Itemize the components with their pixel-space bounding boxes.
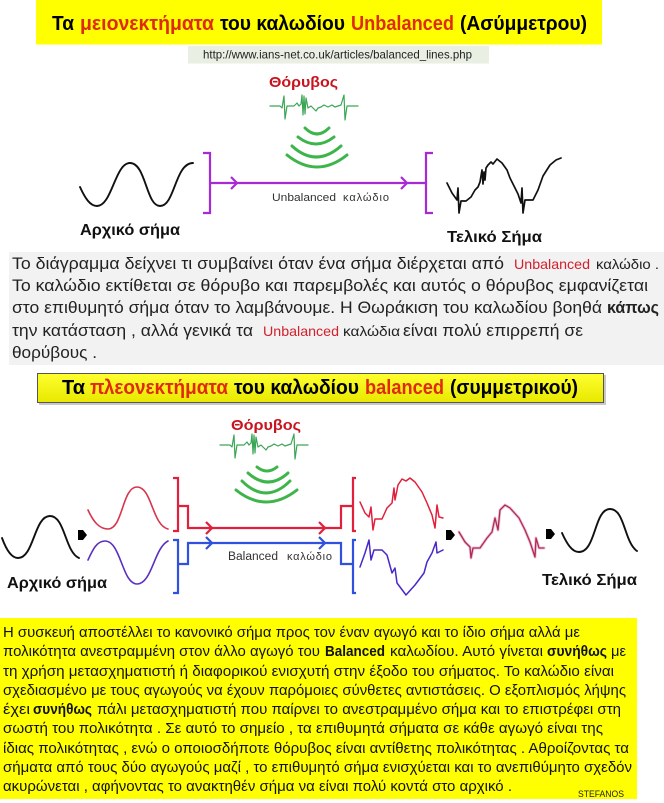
icon: arrow to split <box>78 530 87 540</box>
text panel: unbalanced explanation: Unbalanced <box>263 323 339 339</box>
text panel: unbalanced explanation <box>9 252 664 365</box>
chart: noisy blue signal <box>360 540 443 595</box>
text panel: balanced explanation: σήματα από τους δύο αγωγούς μαζί , το επιθυμητό σήμα ενισχύεται και το ανεπιθύμητο σχεδόν <box>3 759 632 776</box>
text panel: balanced explanation: σχεδιασμένο με τους αγωγούς να έχουν παρόμοιες σύνθετες αντιστάσεις. Ο εξοπλισμός λήψης <box>3 682 626 699</box>
title: advantages of balanced cable: Τα <box>62 377 86 399</box>
title: disadvantages of unbalanced cable: (Ασύμμετρου) <box>460 13 587 35</box>
title: advantages of balanced cable: (συμμετρικού) <box>450 377 578 399</box>
text panel: balanced explanation: ίδιας πολικότητας , ενώ ο οποιοσδήποτε θόρυβος είναι αντίθετης πολικότητας . Αθροίζοντας τα <box>3 740 629 757</box>
icon: noise radiating arcs <box>236 467 297 502</box>
title: disadvantages of unbalanced cable <box>36 0 602 44</box>
chart: balanced blue conductor <box>173 537 356 593</box>
title: advantages of balanced cable: πλεονεκτήματα <box>90 377 229 399</box>
heading: noise (unbalanced diagram): Θόρυβος <box>269 74 338 91</box>
text panel: balanced explanation: με <box>611 643 626 660</box>
label: balanced cable <box>228 551 332 563</box>
label: original signal: Αρχικό σήμα <box>7 575 107 592</box>
icon: noise waveform <box>270 95 358 120</box>
title: disadvantages of unbalanced cable: του καλωδίου <box>220 13 345 35</box>
title: advantages of balanced cable: balanced <box>365 377 444 399</box>
text panel: balanced explanation: Balanced <box>325 643 385 660</box>
label: unbalanced cable: Unbalanced <box>272 192 336 204</box>
chart: balanced red conductor <box>173 478 356 534</box>
text panel: unbalanced explanation: θορύβους . <box>12 344 97 362</box>
label: original signal: Αρχικό σήμα <box>80 222 180 239</box>
label: balanced cable: Balanced <box>228 551 278 563</box>
text panel: balanced explanation <box>0 618 637 799</box>
title: disadvantages of unbalanced cable: Τα <box>52 13 75 35</box>
heading: noise (balanced diagram): Θόρυβος <box>231 417 301 434</box>
icon: noise waveform <box>220 434 308 459</box>
icon: arrow to sum <box>446 530 455 540</box>
text panel: unbalanced explanation: κάπως <box>607 299 659 317</box>
text panel: balanced explanation: πάλι μετασχηματιστή που παίρνει το ανεστραμμένο σήμα και το επιστρέφει στη <box>97 701 621 718</box>
text panel: balanced explanation: πολικότητα ανεστραμμένη στον άλλο αγωγό του <box>3 643 320 660</box>
text panel: balanced explanation: τη χρήση μετασχηματιστή ή διαφορικού ενισχυτή στην έξοδο του σήματος. Το καλώδιο είναι <box>3 663 614 680</box>
label: final signal: Τελικό Σήμα <box>542 572 637 589</box>
text panel: balanced explanation: συνήθως <box>547 643 607 660</box>
text panel: balanced explanation: καλωδίου. Αυτό γίνεται <box>390 643 543 660</box>
chart: unbalanced cable with connectors <box>203 153 433 213</box>
text panel: unbalanced explanation: καλώδιο . <box>596 256 659 272</box>
label: final signal: Τελικό Σήμα <box>447 229 542 246</box>
icon: noise radiating arcs <box>287 128 347 167</box>
text panel: balanced explanation: ακυρώνεται , αφήνοντας το ανακτηθέν σήμα να είναι πολύ κοντά στο αρχικό . <box>3 778 512 795</box>
text panel: balanced explanation: Η συσκευή αποστέλλει το κανονικό σήμα προς τον έναν αγωγό και το ίδιο σήμα αλλά με <box>3 624 580 641</box>
chart: original signal wave <box>80 163 193 206</box>
label: balanced cable: καλώδιο <box>287 551 332 563</box>
title: disadvantages of unbalanced cable: μειονεκτήματα <box>80 13 215 35</box>
label: unbalanced cable <box>272 192 389 204</box>
label: unbalanced cable: καλώδιο <box>343 192 389 204</box>
chart: inverted signal wave <box>88 541 168 584</box>
text panel: unbalanced explanation: είναι πολύ επιρρεπή σε <box>403 322 584 340</box>
text panel: unbalanced explanation: στο επιθυμητό σήμα όταν το λαμβάνουμε. Η Θωράκιση του καλωδίου βοηθά <box>12 299 602 317</box>
chart: final signal wave <box>562 509 637 552</box>
title: disadvantages of unbalanced cable: Unbalanced <box>351 13 454 35</box>
text panel: unbalanced explanation: την κατάσταση , αλλά γενικά τα <box>12 322 253 340</box>
title: advantages of balanced cable <box>38 374 606 405</box>
chart: noisy received signal <box>447 158 561 213</box>
author credit: STEFANOS <box>578 789 624 799</box>
text panel: unbalanced explanation: καλώδια <box>343 323 400 339</box>
icon: arrow to output <box>546 529 555 539</box>
text panel: unbalanced explanation: Το καλώδιο εκτίθεται σε θόρυβο και παρεμβολές και αυτός ο θόρυβος εμφανίζεται <box>12 277 648 295</box>
text panel: balanced explanation: έχει <box>3 701 30 718</box>
chart: summed signal <box>459 505 544 558</box>
text panel: balanced explanation: συνήθως <box>33 701 92 718</box>
text panel: balanced explanation: σωστή του πολικότητα . Σε αυτό το σημείο , τα επιθυμητά σήματα σε κάθε αγωγό είναι της <box>3 720 603 737</box>
chart: original signal wave <box>2 516 79 558</box>
text panel: unbalanced explanation: Unbalanced <box>514 256 590 272</box>
chart: positive signal wave <box>88 487 168 529</box>
source url box: http://www.ians-net.co.uk/articles/balanced_lines.php <box>203 48 472 62</box>
text panel: unbalanced explanation: Το διάγραμμα δείχνει τι συμβαίνει όταν ένα σήμα διέρχεται από <box>12 255 504 273</box>
title: advantages of balanced cable: του καλωδίου <box>234 377 359 399</box>
chart: noisy red signal <box>360 478 443 530</box>
